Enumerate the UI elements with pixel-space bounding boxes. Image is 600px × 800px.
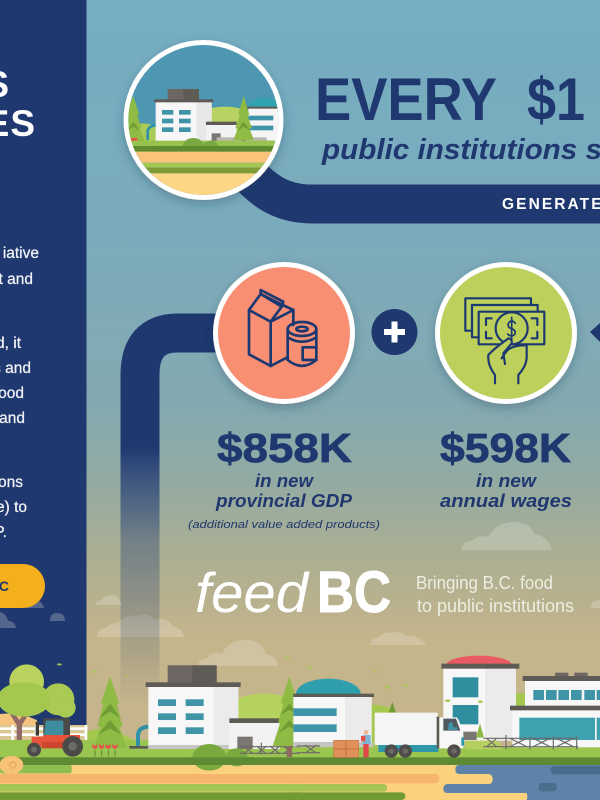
tractor bbox=[27, 718, 83, 757]
sidebar body text: iative bbox=[3, 245, 39, 262]
note: (additional value added products) bbox=[188, 519, 380, 531]
value: $858K bbox=[217, 425, 352, 471]
description: provincial GDP bbox=[215, 491, 353, 511]
stat: wages bbox=[435, 262, 577, 511]
grass bbox=[0, 740, 300, 757]
connector: faded path to logo bbox=[140, 333, 225, 705]
field behind fence bbox=[0, 713, 45, 740]
logo tagline: to public institutions bbox=[417, 596, 574, 616]
person bbox=[361, 730, 371, 757]
grass and road bbox=[299, 747, 600, 757]
stat: GDP bbox=[188, 262, 380, 531]
icon: next connector tip bbox=[590, 323, 600, 342]
pipe bbox=[138, 727, 149, 747]
logo tagline bbox=[416, 573, 574, 616]
icon: campus scene in circle bbox=[121, 40, 283, 200]
pine bbox=[93, 677, 127, 748]
value: $598K bbox=[440, 425, 571, 471]
ground scene: right bbox=[287, 656, 600, 800]
ground scene: left bbox=[0, 656, 306, 800]
tulips bbox=[92, 744, 117, 757]
subtitle: public institutions s bbox=[321, 134, 600, 166]
pine right bbox=[273, 677, 306, 757]
delivery truck bbox=[375, 713, 464, 758]
logo: feed BC: feed bbox=[195, 561, 310, 624]
leaves bbox=[307, 666, 483, 703]
hill bbox=[370, 705, 400, 747]
description bbox=[440, 471, 572, 511]
wire fence bbox=[240, 743, 300, 755]
description: annual wages bbox=[440, 491, 572, 511]
sidebar clouds bbox=[0, 601, 65, 628]
title: EVERY bbox=[315, 66, 497, 133]
bushes bbox=[192, 744, 226, 771]
wire fence bbox=[483, 735, 578, 749]
logo: feed BC: BC bbox=[317, 560, 391, 625]
dome building bbox=[247, 98, 282, 141]
icon: hand with cash bbox=[435, 262, 577, 404]
water bbox=[443, 765, 600, 800]
hill bbox=[87, 729, 133, 755]
description: in new bbox=[255, 471, 314, 491]
sidebar body text bbox=[0, 245, 39, 541]
main building bbox=[154, 89, 237, 142]
leaves bbox=[57, 656, 289, 677]
description bbox=[215, 471, 353, 511]
title: $1 bbox=[527, 66, 585, 133]
logo: feed BC bbox=[195, 560, 391, 625]
crates bbox=[334, 740, 359, 757]
sidebar heading bbox=[0, 64, 36, 144]
button bbox=[0, 564, 45, 608]
bush bbox=[465, 741, 502, 749]
fence bbox=[0, 725, 87, 741]
pine right bbox=[233, 96, 254, 147]
tree bbox=[0, 664, 76, 750]
pine left bbox=[128, 96, 144, 143]
low building bbox=[510, 673, 600, 749]
icon: plus bbox=[372, 309, 418, 355]
hay bale bbox=[0, 756, 23, 774]
connector: top circle to generates bar bbox=[240, 165, 600, 204]
dome building bbox=[293, 679, 374, 747]
description: in new bbox=[476, 471, 537, 491]
main building bbox=[146, 665, 280, 749]
panel: left sidebar bbox=[0, 0, 86, 745]
icon: milk carton and can bbox=[213, 262, 355, 404]
clouds bbox=[95, 522, 600, 666]
logo tagline: Bringing B.C. food bbox=[416, 573, 553, 593]
tall building bbox=[441, 656, 519, 741]
